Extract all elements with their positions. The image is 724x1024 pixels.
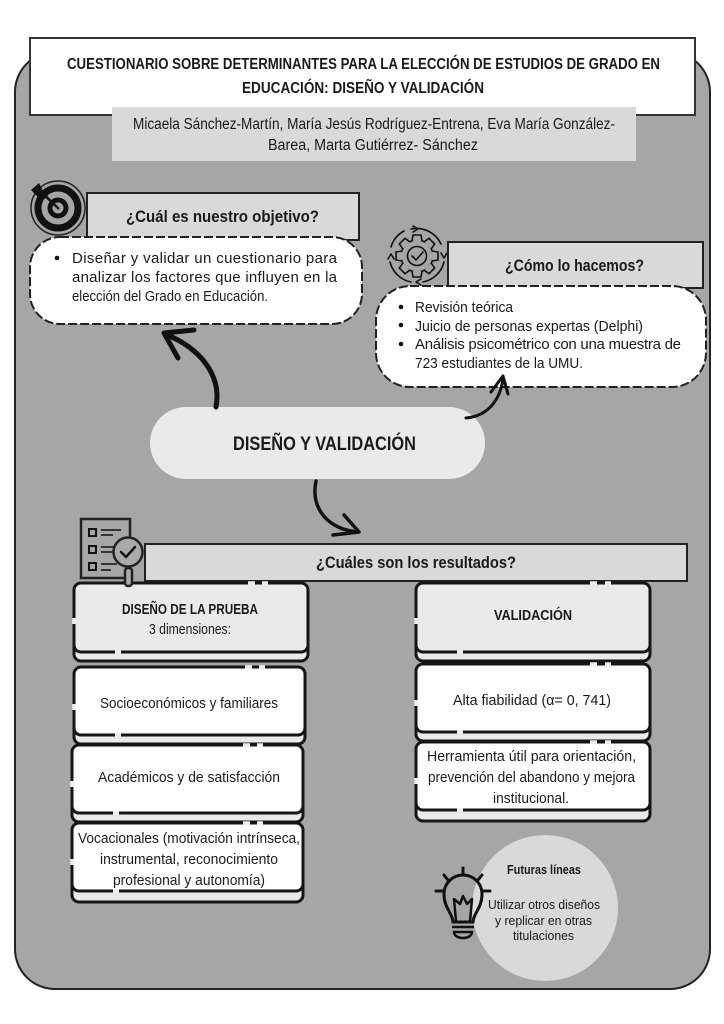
panel: cómo [376,286,706,387]
card: vocacionales: profesional y autonomía) [113,872,265,889]
arrow to objetivo [164,330,217,407]
title [30,38,695,115]
heading: cómo [448,242,703,288]
authors: Micaela Sánchez-Martín, María Jesús Rodríguez-Entrena, Eva María González- [133,116,615,133]
card: fiabilidad: Alta fiabilidad (α= 0, 741) [453,692,611,709]
heading: objetivo: ¿Cuál es nuestro objetivo? [126,207,319,226]
card: vocacionales: Vocacionales (motivación intrínseca, [78,830,300,847]
card: socioeconómicos [74,667,305,744]
central pill [150,407,485,479]
panel: futuras líneas: y replicar en otras [495,913,592,928]
heading: resultados [145,544,687,581]
panel: objetivo [30,237,362,324]
panel: cómo: Juicio de personas expertas (Delphi) [415,318,643,335]
icon: light bulb [436,868,490,938]
card: herramienta: institucional. [493,790,569,807]
card: vocacionales: instrumental, reconocimiento [100,851,278,868]
arrow to resultados [315,481,359,535]
card: validación: VALIDACIÓN [494,606,572,624]
card: diseño de la prueba: 3 dimensiones: [149,621,231,638]
card: socioeconómicos: Socioeconómicos y familiares [100,695,278,712]
card: diseño de la prueba: DISEÑO DE LA PRUEBA [122,600,258,618]
heading: resultados: ¿Cuáles son los resultados? [316,553,516,572]
icon: checklist [81,519,130,578]
icon: magnifier [114,538,142,586]
card: vocacionales [72,823,303,902]
card: fiabilidad [416,664,650,741]
arrow to cómo [466,376,508,418]
panel: objetivo: Diseñar y validar un cuestionario para [72,250,338,267]
panel: objetivo: elección del Grado en Educación. [72,288,268,305]
card: herramienta: Herramienta útil para orientación, [427,748,636,765]
panel: objetivo: analizar los factores que influyen en la [72,269,338,286]
card: diseño de la prueba [74,583,308,661]
heading: objetivo [87,193,359,240]
card: validación [416,583,650,661]
central pill: DISEÑO Y VALIDACIÓN [233,433,416,455]
title: EDUCACIÓN: DISEÑO Y VALIDACIÓN [242,77,484,97]
heading: cómo: ¿Cómo lo hacemos? [505,256,644,275]
icon: gear [388,226,447,285]
panel: cómo: Análisis psicométrico con una muestra de [415,336,681,353]
panel: futuras líneas: Utilizar otros diseños [488,897,600,912]
icon: target [31,181,85,235]
authors: Barea, Marta Gutiérrez- Sánchez [268,137,478,154]
panel: futuras líneas [472,835,618,981]
card: académicos [72,745,303,822]
panel: futuras líneas: titulaciones [513,928,574,943]
panel: cómo: 723 estudiantes de la UMU. [415,355,583,372]
panel: futuras líneas: Futuras líneas [507,863,581,877]
panel: cómo: Revisión teórica [415,299,514,316]
card: herramienta [416,742,650,821]
card: académicos: Académicos y de satisfacción [98,769,280,786]
card: herramienta: prevención del abandono y mejora [428,769,636,786]
authors [112,107,636,161]
